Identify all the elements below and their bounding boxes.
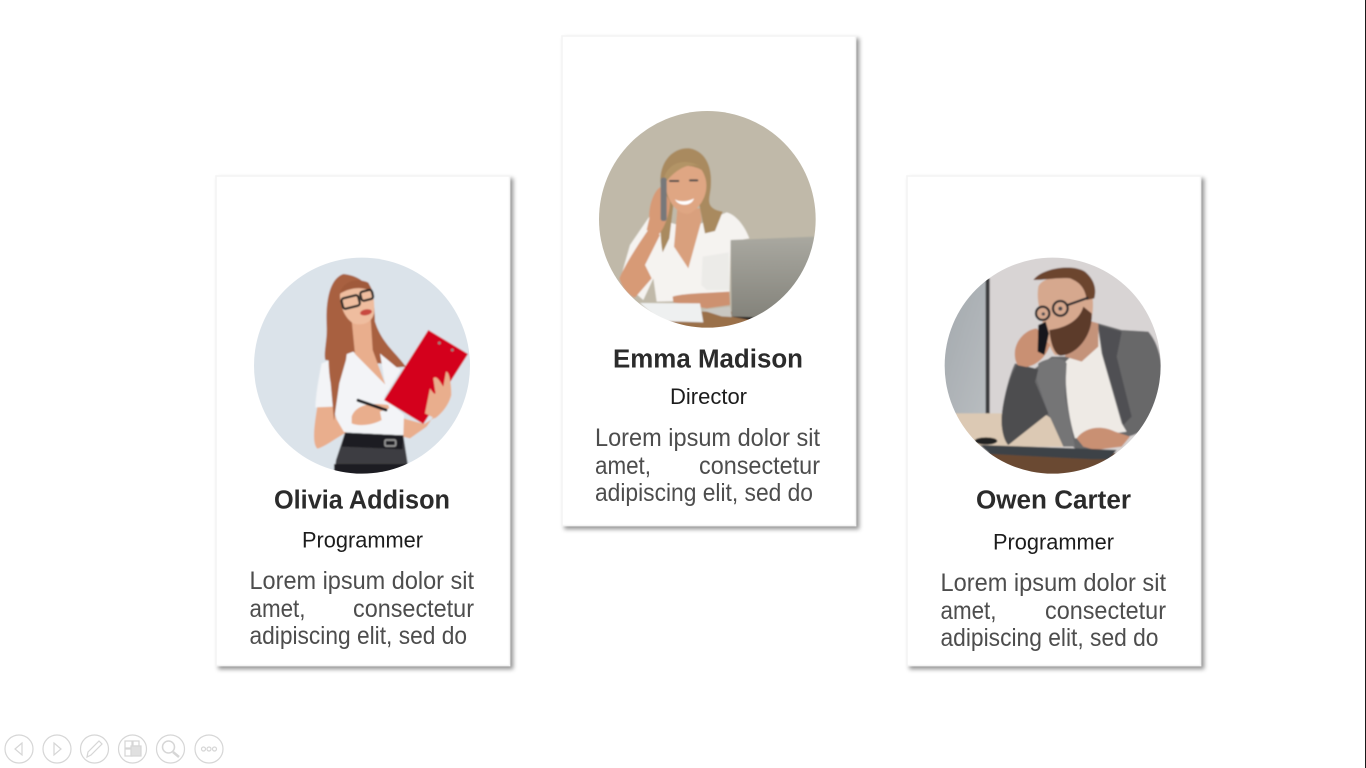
description: adipiscing elit, sed do [595, 479, 813, 507]
description: adipiscing elit, sed do [250, 622, 467, 650]
icon: next [43, 735, 71, 763]
description: amet, [595, 452, 651, 480]
photo: Olivia Addison [250, 253, 477, 480]
role: Director: Director [670, 384, 747, 409]
description: amet, [250, 595, 306, 623]
name: Olivia Addison: Olivia Addison [274, 486, 450, 514]
role: Programmer: Programmer [993, 530, 1114, 554]
description [250, 567, 474, 650]
description: Lorem ipsum dolor sit [250, 567, 474, 595]
name: Emma Madison: Emma Madison [613, 346, 803, 374]
description: Lorem ipsum dolor sit [940, 569, 1166, 597]
icon: slides [118, 735, 146, 763]
description: Lorem ipsum dolor sit [595, 424, 820, 452]
description [595, 424, 820, 507]
description: consectetur [1045, 597, 1166, 625]
slide right edge line [1365, 0, 1366, 768]
photo: Owen Carter [944, 258, 1161, 474]
role: Programmer: Programmer [302, 528, 423, 552]
description: consectetur [353, 595, 474, 623]
description: adipiscing elit, sed do [940, 624, 1158, 652]
description: amet, [940, 597, 996, 625]
icon: more [195, 735, 223, 763]
slideshow navigation controls [5, 735, 223, 763]
name: Owen Carter: Owen Carter [976, 486, 1131, 514]
panel: Emma Madison card [562, 36, 856, 526]
description [940, 569, 1166, 652]
panel: Olivia Addison card [216, 176, 510, 666]
photo: Emma Madison [593, 107, 820, 333]
description: consectetur [699, 452, 820, 480]
panel: Owen Carter card [907, 176, 1200, 666]
icon: pen [80, 735, 108, 763]
icon: previous [5, 735, 33, 763]
icon: zoom [156, 735, 184, 763]
